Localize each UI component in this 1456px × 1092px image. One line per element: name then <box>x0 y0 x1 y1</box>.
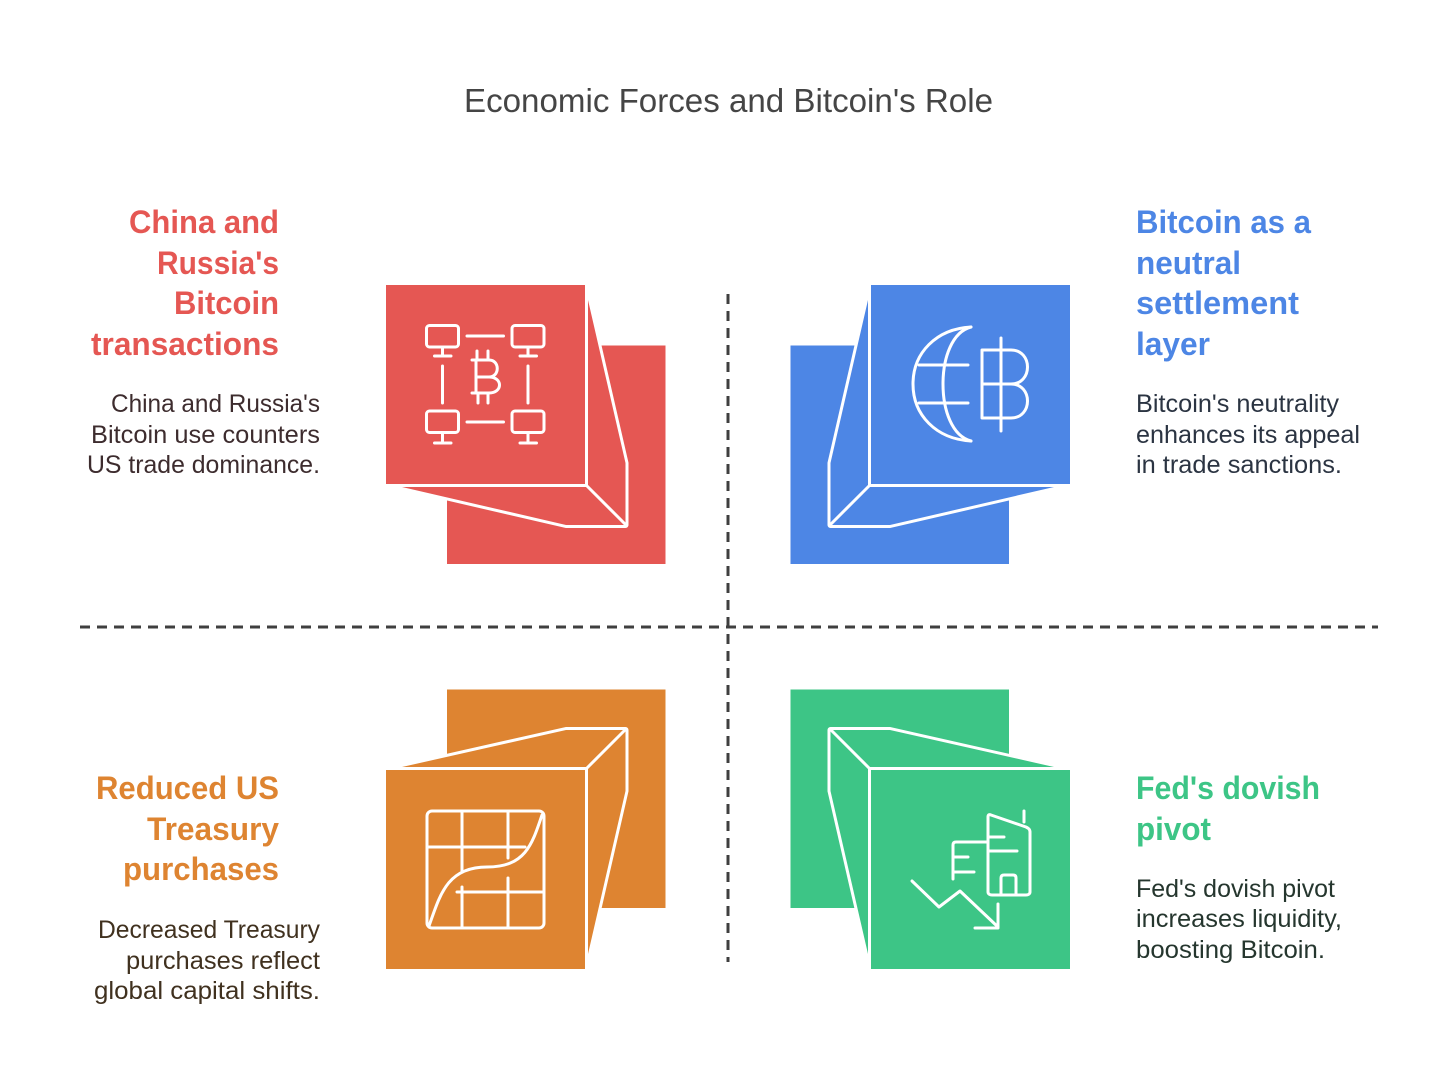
body text: liquidity: boosting Bitcoin. <box>1136 936 1325 964</box>
body text: neutrality: in trade sanctions. <box>1136 451 1342 479</box>
blue cube graphic <box>790 285 1070 564</box>
icon: grid chart with curve <box>427 811 544 928</box>
body text: liquidity: Fed's dovish pivot <box>1136 875 1335 903</box>
icon: bitcoin network of computers <box>426 326 544 443</box>
body text: liquidity: increases liquidity, <box>1136 905 1342 933</box>
green cube graphic <box>790 690 1070 969</box>
heading: China and Russia: transactions <box>91 326 279 362</box>
heading: neutral settlement layer: neutral <box>1136 245 1241 281</box>
icon: globe and bitcoin symbol <box>913 327 1028 441</box>
panel: Fed's dovish pivot <box>790 690 1342 969</box>
body text: neutrality: enhances its appeal <box>1136 421 1360 449</box>
panel: China and Russia's Bitcoin transactions <box>87 204 666 564</box>
body text: Treasury: Decreased Treasury <box>98 916 320 944</box>
body text: Treasury <box>94 916 320 1005</box>
orange cube graphic <box>386 690 666 969</box>
heading: neutral settlement layer: layer <box>1136 326 1210 362</box>
red cube graphic <box>386 285 666 564</box>
heading: Fed's dovish pivot <box>1136 770 1320 847</box>
heading: Fed's dovish pivot: Fed's dovish <box>1136 770 1320 806</box>
body text: China and Russia: China and Russia's <box>111 390 320 418</box>
body text: liquidity <box>1136 875 1342 964</box>
heading: China and Russia <box>91 204 279 362</box>
horizontal dashed divider <box>80 626 1378 628</box>
body text: China and Russia: Bitcoin use counters <box>91 421 320 449</box>
heading: China and Russia: Russia's <box>157 245 279 281</box>
icon: buildings with falling arrow <box>912 811 1030 928</box>
vertical dashed divider <box>726 294 730 962</box>
heading: Fed's dovish pivot: pivot <box>1136 811 1211 847</box>
heading: Reduced US Treasury purchases <box>96 770 279 887</box>
panel: Reduced US Treasury purchases <box>94 690 666 1005</box>
body text: China and Russia <box>87 390 320 479</box>
heading: Reduced US Treasury purchases: Treasury <box>147 811 279 847</box>
body text: China and Russia: US trade dominance. <box>87 451 320 479</box>
heading: neutral settlement layer: settlement <box>1136 285 1299 321</box>
heading: neutral settlement layer <box>1136 204 1311 362</box>
body text: Treasury: purchases reflect <box>126 947 320 975</box>
heading: China and Russia: Bitcoin <box>174 285 279 321</box>
panel: Bitcoin as a neutral settlement layer <box>790 204 1360 564</box>
heading: neutral settlement layer: Bitcoin as a <box>1136 204 1311 240</box>
heading: Reduced US Treasury purchases: purchases <box>123 851 279 887</box>
body text: neutrality <box>1136 390 1360 479</box>
body text: neutrality: Bitcoin's neutrality <box>1136 390 1339 418</box>
heading: Reduced US Treasury purchases: Reduced US <box>96 770 279 806</box>
body text: Treasury: global capital shifts. <box>94 977 320 1005</box>
heading: China and Russia: China and <box>129 204 279 240</box>
title: Economic Forces and Bitcoin's Role <box>464 82 993 119</box>
